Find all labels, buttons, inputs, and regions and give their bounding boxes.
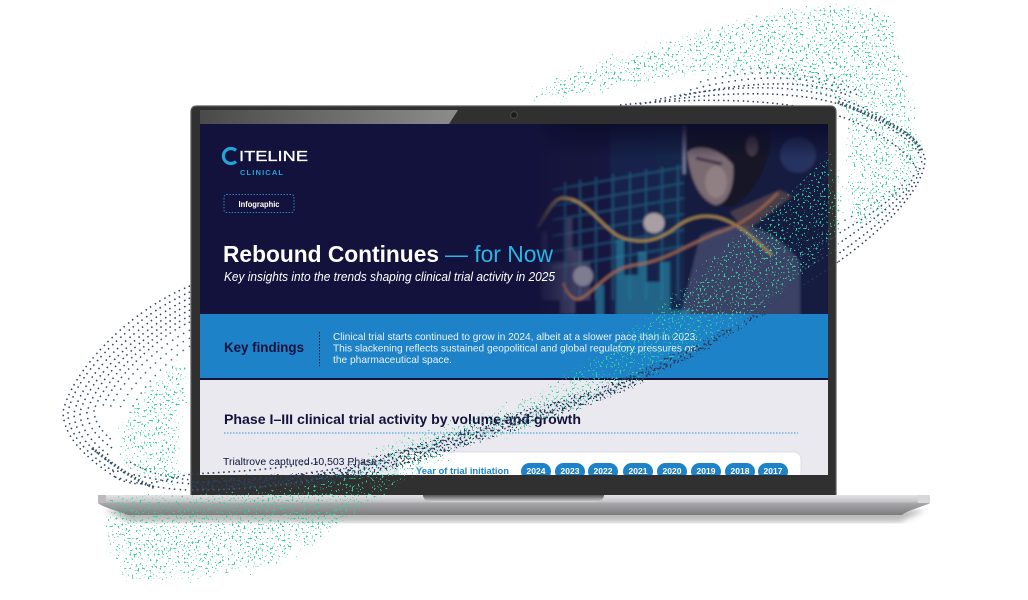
green particles: upper right arc: [505, 0, 930, 240]
laptop bezel: [191, 106, 836, 495]
green particles: left arc: [112, 345, 192, 490]
logo: [223, 148, 308, 177]
laptop base: [98, 495, 930, 515]
selector label: Year of trial initiation: [416, 466, 509, 477]
key findings text: Clinical trial starts continued to grow in 2024, albeit at a slower pace than in 2023.: [333, 331, 698, 343]
laptop drop shadow: [104, 510, 925, 522]
logo: ITELINE: [239, 148, 308, 165]
chart grid: [552, 165, 684, 300]
header panel: [200, 120, 832, 318]
particle swoosh behind laptop: [63, 0, 930, 490]
light bokeh circles: [644, 213, 664, 233]
key findings text: the pharmaceutical space.: [333, 354, 452, 366]
dark dotted band: upper right arc: [620, 67, 925, 262]
teal candlesticks: [596, 240, 690, 318]
year labels: 2020: [663, 466, 682, 476]
laptop hinge notch: [423, 495, 604, 502]
year labels: [526, 468, 782, 474]
year labels: 2022: [594, 466, 613, 476]
intro text: Trialtrove captured 10,503 Phase: [223, 457, 377, 468]
hero photo: analyst with charts: [536, 124, 828, 314]
title: Rebound Continues: [223, 241, 439, 267]
year labels: 2021: [629, 466, 648, 476]
section heading: Phase I–III clinical trial activity by volume and growth: [224, 412, 581, 427]
green particles: screen right side, diagonal and lower cloud: [100, 135, 850, 586]
year pills: [521, 463, 788, 475]
card: year selector: [398, 452, 802, 475]
year labels: 2023: [561, 466, 580, 476]
badge: infographic: Infographic: [238, 199, 280, 209]
year labels: 2018: [731, 466, 750, 476]
logo: CLINICAL: [240, 168, 283, 177]
year labels: 2017: [764, 466, 783, 476]
dark dotted band: left arc: [63, 286, 192, 490]
dark core of upper right arc: [838, 102, 921, 152]
year labels: 2024: [527, 466, 546, 476]
dark particles: diagonal core: [190, 306, 770, 494]
panel: key findings: [200, 314, 828, 380]
key findings heading: Key findings: [224, 340, 304, 355]
orange trend lines: [537, 198, 772, 255]
subtitle: Key insights into the trends shaping clinical trial activity in 2025: [224, 269, 556, 284]
badge: infographic: [224, 194, 294, 212]
laptop screen: [200, 120, 832, 492]
dark core of left arc: [92, 448, 155, 488]
dark dotted rows: right tail: [735, 236, 838, 316]
title accent: — for Now: [445, 241, 553, 267]
panel: trial activity: [200, 380, 828, 475]
year labels: 2019: [697, 466, 716, 476]
particle swoosh in front of laptop: [100, 135, 850, 586]
key findings text: This slackening reflects sustained geopolitical and global regulatory pressures on: [333, 342, 696, 354]
key findings text: [333, 331, 698, 366]
dark dotted rows: lower left: [192, 462, 350, 490]
grey candlesticks: [541, 218, 590, 314]
laptop: [98, 106, 930, 522]
